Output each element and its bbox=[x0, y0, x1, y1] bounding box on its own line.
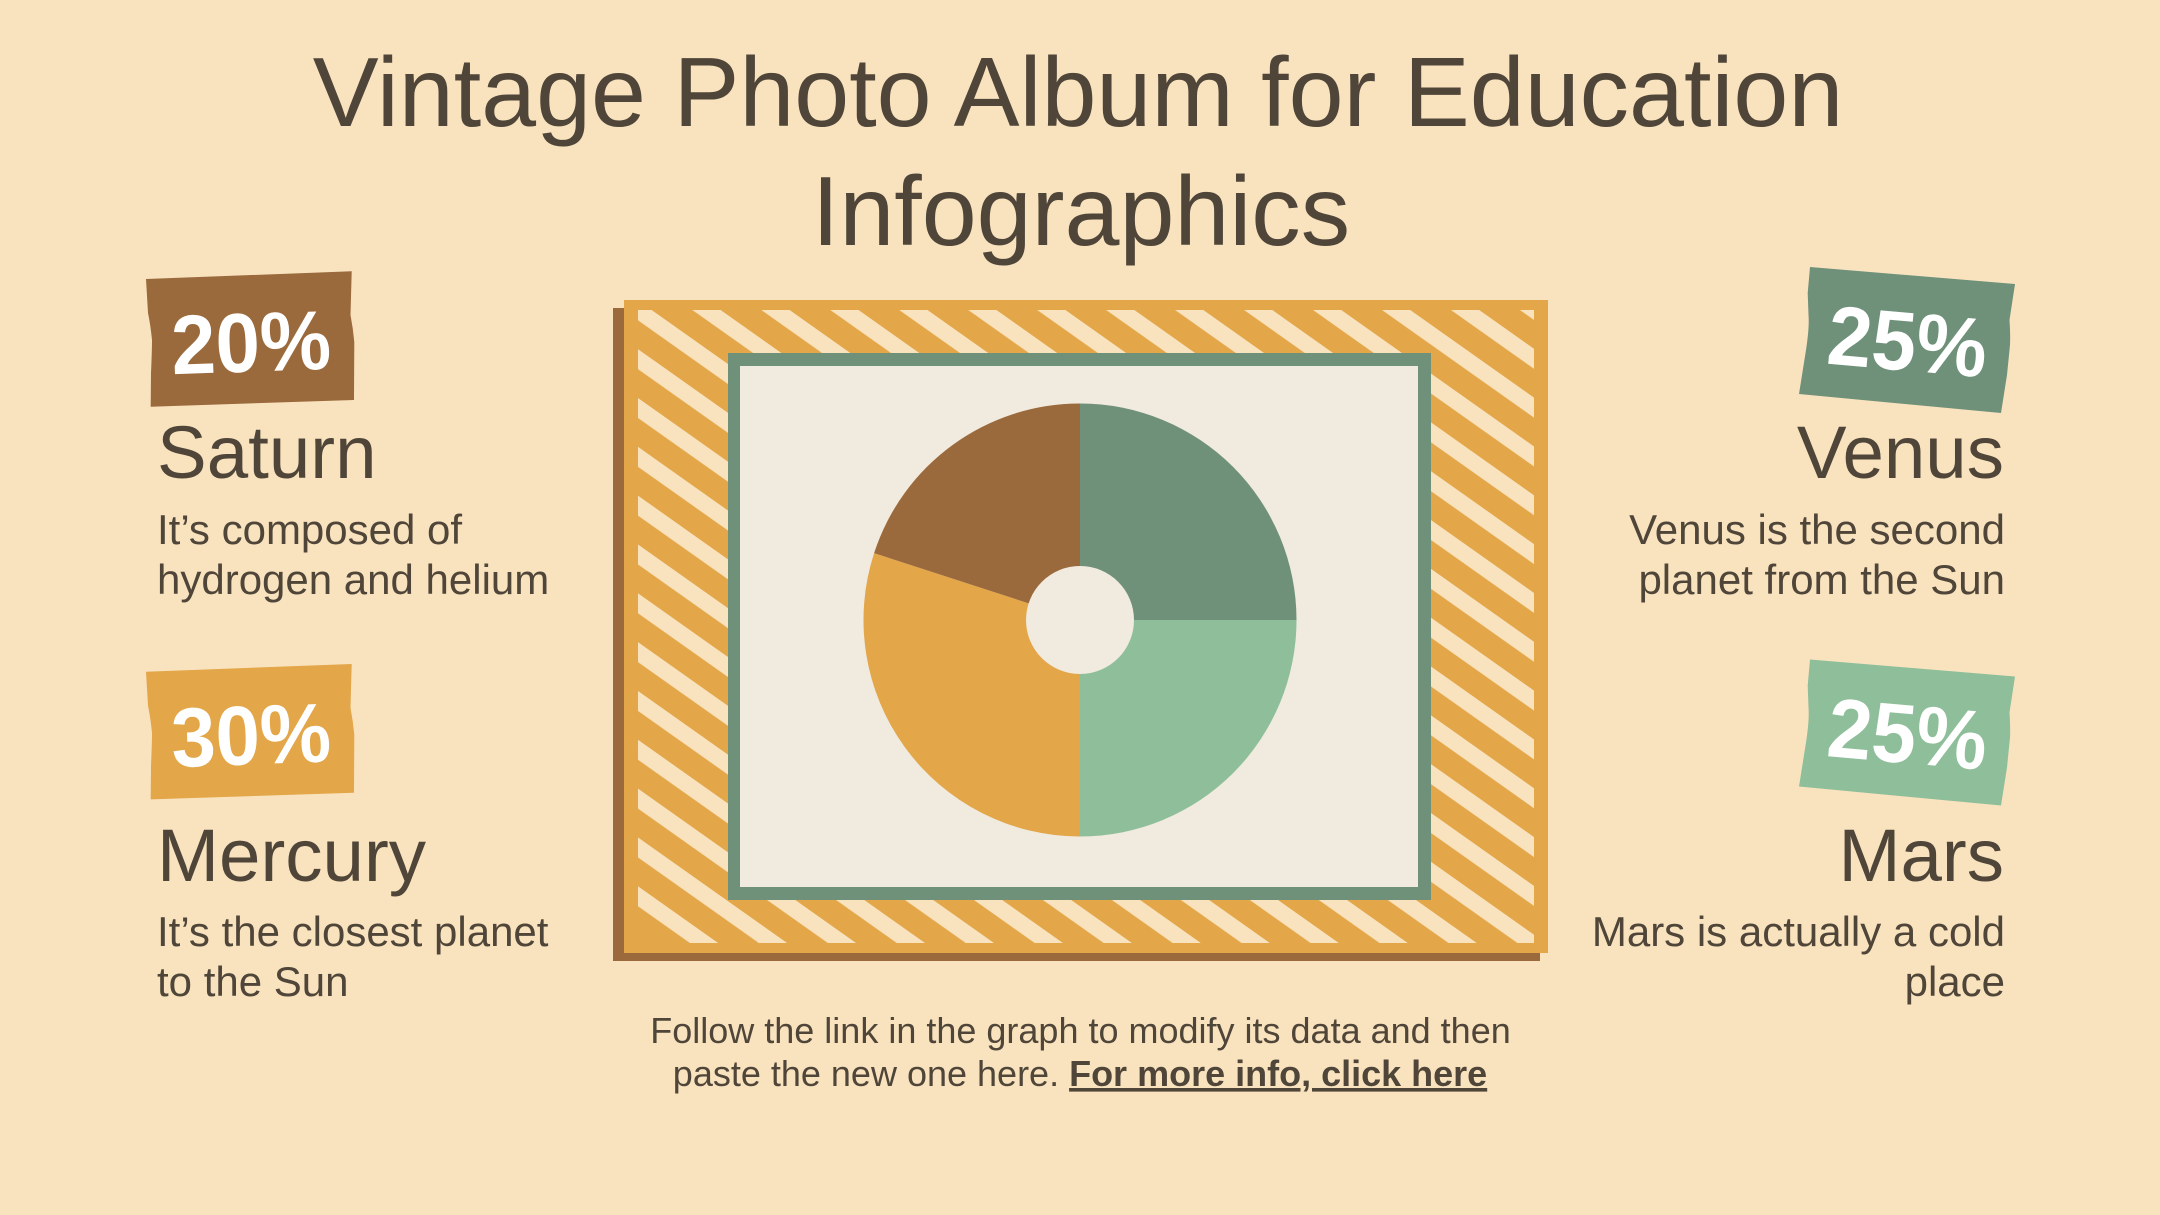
description: Mars: Mars is actually a cold bbox=[1592, 908, 2005, 955]
badge: 25% bbox=[1799, 660, 2015, 806]
panel: Venus bbox=[1629, 267, 2015, 603]
pie centre hole bbox=[1026, 566, 1134, 674]
striped mat bbox=[638, 310, 1534, 943]
slice: Venus 25% bbox=[1080, 404, 1296, 620]
panel: photo frame bbox=[613, 300, 1548, 961]
footer note: Follow the link in the graph to modify its data and then bbox=[650, 1010, 1511, 1051]
title bbox=[313, 37, 1843, 266]
slice: Mercury 30% bbox=[864, 553, 1080, 836]
description: Venus: planet from the Sun bbox=[1638, 556, 2005, 603]
badge: 30%: 30% bbox=[170, 687, 332, 785]
footer note: paste the new one here. bbox=[673, 1053, 1069, 1094]
description: Saturn: It’s composed of bbox=[157, 506, 462, 553]
footer note: For more info, click here bbox=[1069, 1053, 1487, 1094]
description: Saturn: hydrogen and helium bbox=[157, 556, 549, 603]
photo area bbox=[740, 366, 1418, 887]
description: Mercury: It’s the closest planet bbox=[157, 908, 549, 955]
heading: Venus: Venus bbox=[1797, 411, 2004, 494]
title: Infographics bbox=[812, 156, 1350, 266]
photo edge bbox=[728, 353, 1431, 900]
description: Mars: place bbox=[1905, 958, 2005, 1005]
heading: Mercury: Mercury bbox=[157, 814, 427, 897]
panel: Saturn bbox=[146, 271, 549, 603]
badge: 20%: 20% bbox=[170, 294, 332, 393]
heading: Saturn: Saturn bbox=[157, 411, 376, 494]
slice: Mars 25% bbox=[1080, 620, 1296, 836]
frame shadow bbox=[613, 308, 1540, 961]
panel: Mercury bbox=[146, 664, 549, 1005]
pie chart bbox=[864, 404, 1296, 836]
heading: Mars: Mars bbox=[1838, 814, 2004, 897]
badge: 20% bbox=[146, 271, 354, 407]
description: Mercury: to the Sun bbox=[157, 958, 348, 1005]
badge: 25%: 25% bbox=[1824, 681, 1991, 788]
description: Venus: Venus is the second bbox=[1629, 506, 2005, 553]
title: Vintage Photo Album for Education bbox=[313, 37, 1843, 147]
slice: Saturn 20% bbox=[874, 404, 1080, 620]
badge: 25% bbox=[1799, 267, 2015, 413]
frame border bbox=[624, 300, 1548, 953]
badge: 30% bbox=[146, 664, 354, 799]
panel: Mars bbox=[1592, 660, 2015, 1005]
badge: 25%: 25% bbox=[1824, 289, 1991, 396]
